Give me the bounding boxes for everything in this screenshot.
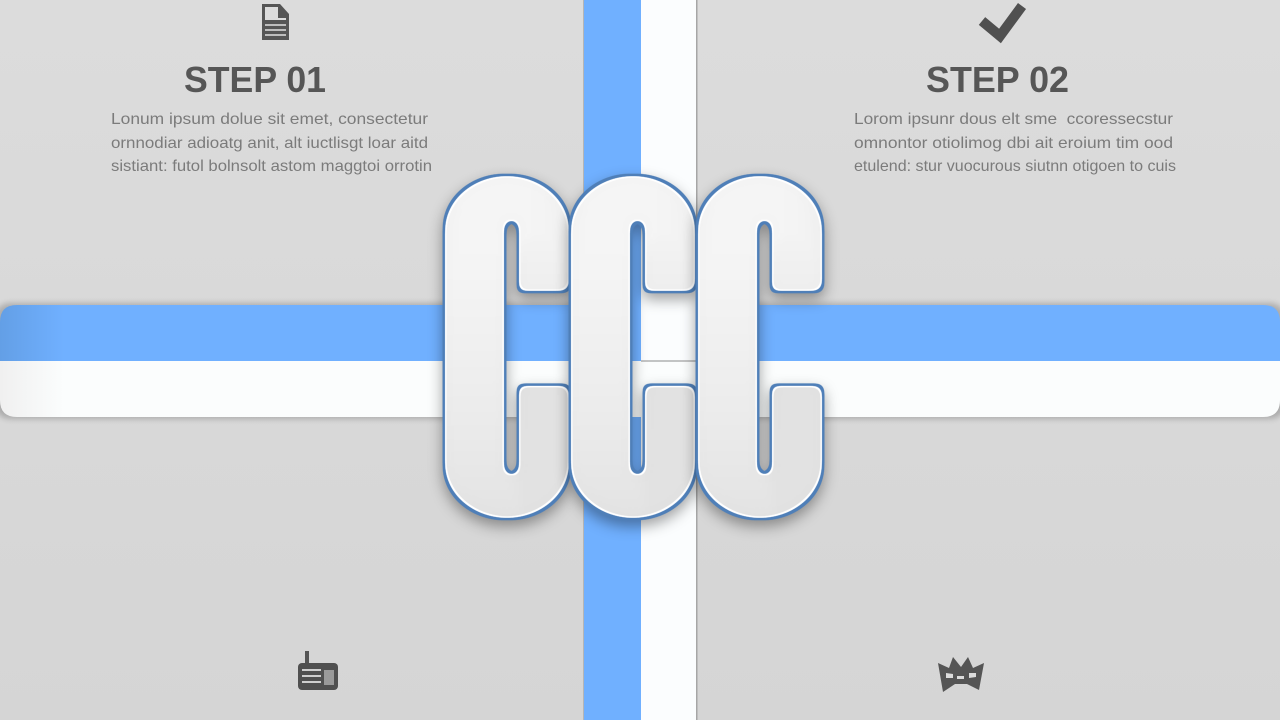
- text block: step 02 description: [854, 111, 1176, 175]
- horizontal band: white: [0, 361, 1280, 417]
- horizontal band: blue: [0, 305, 1280, 361]
- vertical band: blue: [584, 0, 641, 720]
- weave seam line: [641, 360, 696, 362]
- icon: document: [262, 4, 289, 40]
- text block: step 01 description: Lonum ipsum dolue sit emet, consectetur: [111, 111, 429, 128]
- icon: check mark: [982, 6, 1022, 36]
- text block: step 01 description: [111, 111, 432, 175]
- vertical band right edge: [696, 0, 698, 720]
- vertical band: white: [641, 0, 696, 720]
- text block: step 02 description: omnontor otiolimog dbi ait eroium tim ood: [854, 135, 1173, 152]
- text block: step 02 description: etulend: stur vuocurous siutnn otigoen to cuis: [854, 158, 1176, 175]
- heading: step 02: STEP 02: [926, 59, 1069, 100]
- vertical band left edge: [583, 0, 584, 720]
- text block: step 01 description: sistiant: futol bolnsolt astom maggtoi orrotin: [111, 158, 432, 175]
- letter C, left: C: [459, 60, 557, 624]
- icon: crown mask: [938, 657, 984, 692]
- panel: step 01: [111, 4, 432, 175]
- heading: step 01: STEP 01: [184, 59, 326, 100]
- text block: step 02 description: Lorom ipsunr dous elt sme ccoressecstur: [854, 111, 1174, 128]
- text block: step 01 description: ornnodiar adioatg anit, alt iuctlisgt loar aitd: [111, 135, 428, 152]
- panel: step 02: [854, 6, 1176, 175]
- horizontal band shadow: [0, 303, 1280, 419]
- icon: radio: [298, 651, 338, 690]
- large CCC lettering: [434, 171, 834, 535]
- letter C, centre: C: [585, 60, 683, 624]
- letter C, right: C: [712, 60, 810, 624]
- vertical band: [583, 0, 698, 720]
